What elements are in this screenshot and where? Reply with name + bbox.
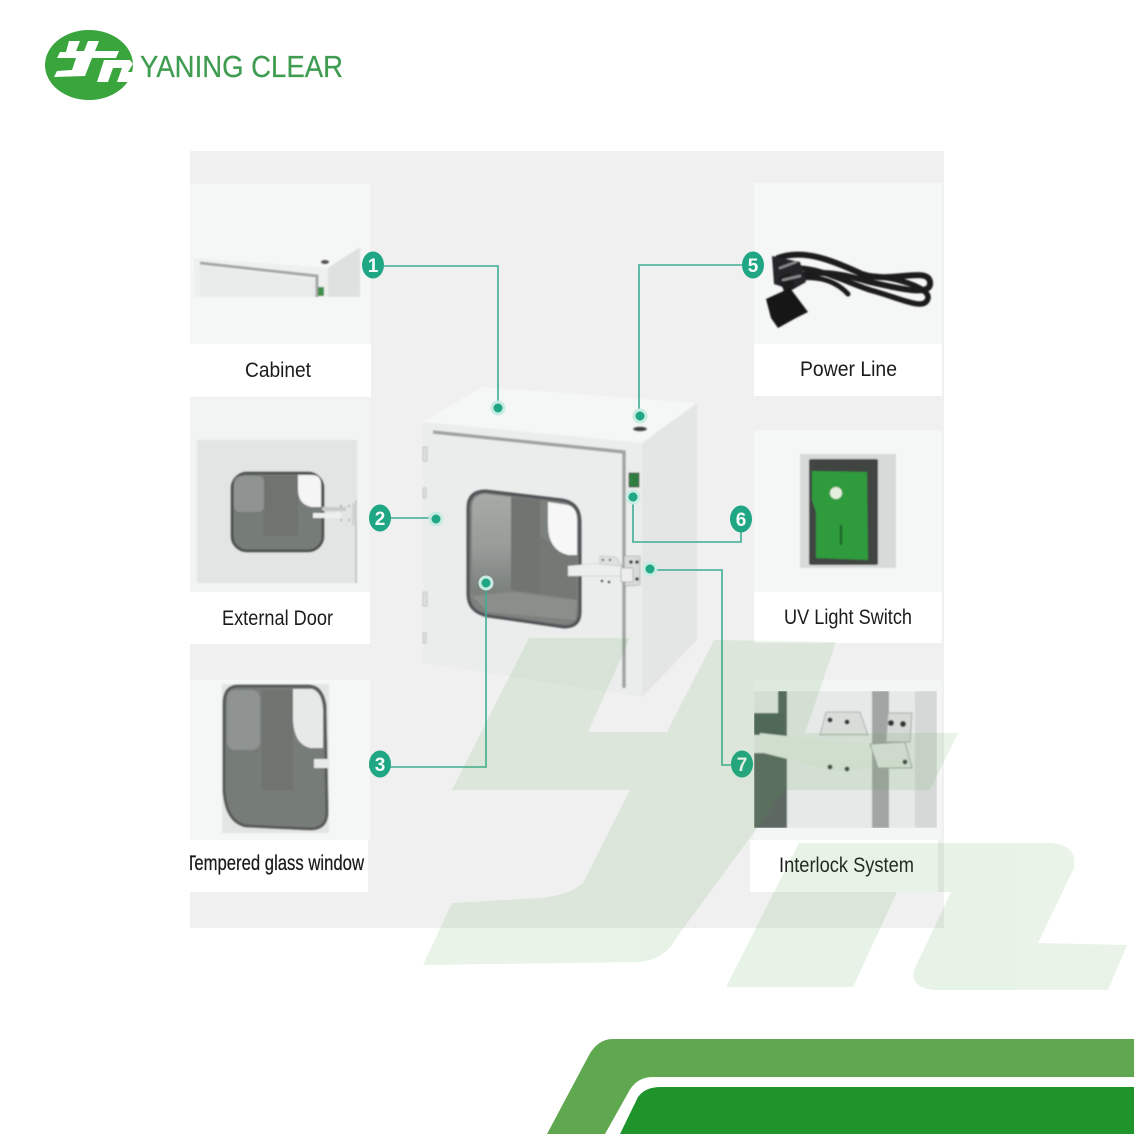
target dots — [430, 402, 656, 589]
panel: Cabinet — [190, 184, 371, 397]
icon: glass crop — [222, 684, 329, 833]
number badge 7 — [731, 750, 753, 778]
line 5 — [639, 265, 742, 410]
logo green oval — [45, 30, 133, 100]
cabinet side — [642, 403, 697, 697]
number badge 6: 6 — [736, 510, 746, 531]
label: Cabinet: Cabinet — [245, 358, 311, 382]
label background — [190, 592, 370, 644]
number badge 6 — [730, 506, 752, 532]
number badge 3: 3 — [375, 755, 385, 776]
label: External Door: External Door — [222, 606, 333, 630]
number badge 1 — [362, 252, 384, 278]
label: UV Light Switch: UV Light Switch — [784, 605, 912, 629]
icon: power cable — [766, 255, 930, 328]
line 6 — [633, 502, 741, 542]
footer band dark green — [620, 1087, 1134, 1134]
line 1 — [384, 266, 498, 402]
panel: Power Line — [754, 183, 942, 396]
number badge 3 — [369, 750, 391, 778]
card background — [754, 680, 942, 840]
cabinet front — [423, 422, 642, 697]
label background — [190, 840, 368, 892]
icon: green rocker switch — [800, 454, 896, 568]
icon: cabinet crop — [194, 247, 360, 297]
logo wordmark: YANING CLEAR — [140, 49, 343, 84]
line 3 — [369, 589, 486, 767]
number badge 1: 1 — [368, 256, 379, 277]
panel: UV Light Switch — [754, 430, 942, 643]
UV switch — [629, 473, 639, 487]
label: Interlock System: Interlock System — [779, 853, 914, 877]
logo white mark — [54, 41, 135, 82]
footer band light green — [547, 1039, 1134, 1134]
number badge 2: 2 — [375, 509, 385, 530]
line 7 — [656, 570, 731, 765]
label background — [754, 344, 942, 396]
hinges — [423, 447, 427, 643]
panel: Interlock System — [750, 680, 942, 892]
watermark logo — [423, 638, 1127, 990]
label background — [754, 592, 942, 643]
logo: Yaning Clear — [45, 30, 343, 100]
icon: interlock crop — [754, 691, 937, 828]
label: Power Line: Power Line — [800, 357, 897, 381]
number badge 2 — [369, 504, 391, 532]
panel: External Door — [190, 398, 370, 644]
line 2 — [391, 517, 430, 519]
label background — [750, 840, 938, 892]
connector lines — [369, 265, 742, 767]
pass box cabinet — [423, 387, 697, 697]
power knob — [633, 426, 647, 432]
panel: Tempered glass window — [186, 680, 370, 892]
card background — [754, 183, 942, 344]
card background — [754, 430, 942, 592]
label: Tempered glass window: Tempered glass window — [186, 851, 364, 875]
number badge 5 — [742, 252, 764, 278]
icon: door crop — [197, 440, 357, 583]
label background — [190, 344, 371, 397]
cabinet top — [423, 387, 697, 443]
door handle — [568, 556, 640, 586]
number badge 5: 5 — [748, 256, 759, 277]
main light grey panel — [190, 151, 944, 928]
number badge 7: 7 — [737, 755, 747, 776]
glass window — [468, 491, 580, 627]
card background — [190, 398, 370, 595]
card background — [190, 184, 370, 344]
card background — [190, 680, 370, 840]
